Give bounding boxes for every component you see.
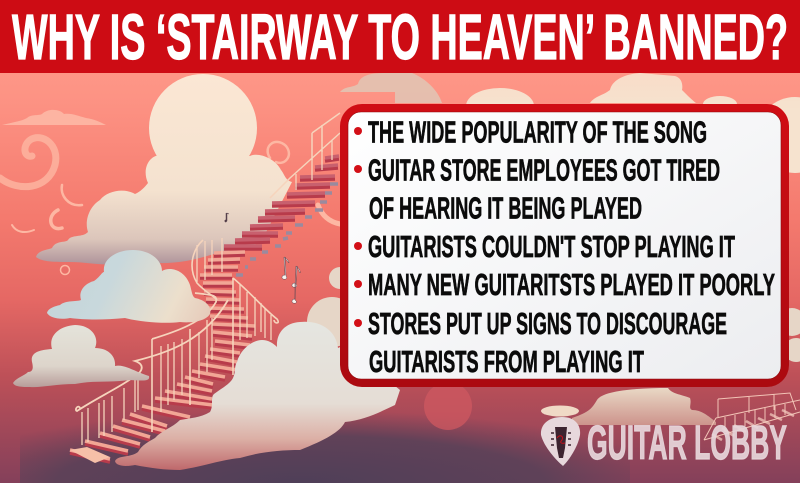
clouds behind panel top [340,73,800,173]
watermark: Guitar Lobby logo [541,417,787,470]
icon: guitar pick with headstock [541,417,580,466]
stair treads [70,252,255,459]
bokeh circle [424,382,472,430]
left lower cloud [13,325,149,387]
cloud right edge of panel [307,267,800,362]
small cloud top left [2,110,106,125]
panel red frame [340,104,789,387]
music notes [225,213,300,303]
note left [282,257,289,279]
title banner [0,0,800,73]
foreground cloud [115,322,400,470]
upper treads fading into haze [224,156,339,246]
large sun cloud [36,74,292,265]
lower right stair [704,393,800,440]
blue-white middle cloud [47,250,210,323]
swirl decorations [0,138,340,274]
cloud behind logo [541,388,716,425]
staircase [70,156,339,463]
note right [292,266,300,303]
panel: reasons list [340,104,789,387]
bullet 5 [354,306,727,379]
stair railings [76,113,340,445]
bottom step front [70,447,110,463]
stair risers [70,159,339,462]
panel white interior [348,112,781,379]
note small [225,213,229,222]
bullet 2 [354,152,720,226]
grey step tips [236,184,338,275]
